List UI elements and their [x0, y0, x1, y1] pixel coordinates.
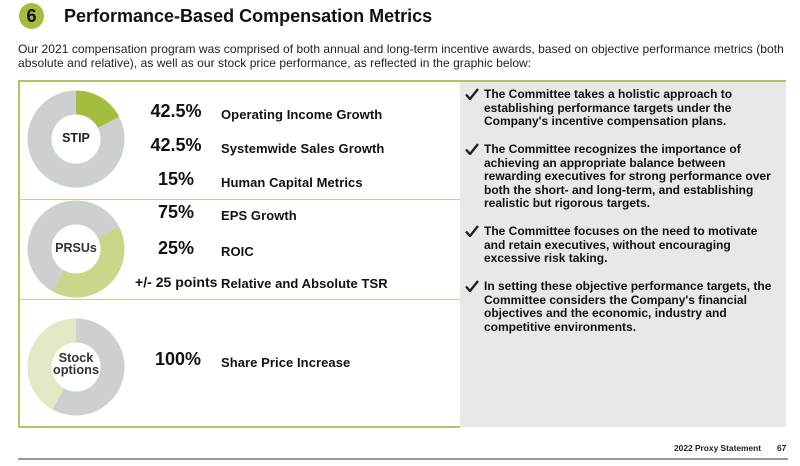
donut chart: Stock options — [28, 318, 124, 416]
row divider — [19, 299, 460, 300]
page number: 67 — [777, 443, 786, 453]
metric label: EPS growth: EPS Growth — [221, 208, 297, 223]
metric label: operating income: Operating Income Growth — [221, 107, 382, 122]
donut chart: PRSUs — [28, 200, 124, 298]
bullet text 2: achieving an appropriate balance between — [484, 156, 725, 170]
bullet text 4: competitive environments. — [484, 320, 636, 334]
bullet text 4: objectives and the economic, industry and — [484, 306, 727, 320]
bullet text 4: In setting these objective performance targets, the — [484, 279, 771, 293]
icon: check 1 — [465, 88, 479, 100]
donut label: Stock options: Stock — [59, 350, 93, 365]
metric value: 100%: 100% — [155, 349, 201, 369]
icon: check 3 — [465, 225, 479, 237]
panel: metrics frame — [18, 80, 460, 428]
icon: check 2 — [465, 143, 479, 155]
donut label: Stock options — [53, 350, 99, 377]
metric value: TSR points: +/- 25 points — [135, 274, 217, 290]
row divider — [19, 199, 460, 200]
bullet text 2: both the short- and long-term, and establishing — [484, 183, 753, 197]
title: Performance-Based Compensation Metrics — [64, 6, 432, 26]
bullet text 2: realistic but rigorous targets. — [484, 196, 650, 210]
section number badge — [19, 3, 44, 29]
metric value: 75% EPS: 75% — [158, 202, 194, 222]
bullet text 1: The Committee takes a holistic approach to — [484, 87, 732, 101]
bullet text 3: and retain executives, without encouraging — [484, 238, 731, 252]
donut label: PRSUs: PRSUs — [55, 241, 97, 255]
icon: check 4 — [465, 280, 479, 292]
metric value: 42.5% operating income: 42.5% — [150, 101, 202, 121]
donut label: Stock options: options — [53, 362, 99, 377]
donut chart: STIP — [28, 90, 124, 188]
bullet text 4 — [484, 279, 771, 334]
intro text — [18, 42, 784, 70]
donut label: STIP: STIP — [62, 131, 90, 145]
bullet text 2: The Committee recognizes the importance of — [484, 142, 741, 156]
bullet text 3 — [484, 224, 757, 265]
intro text: absolute and relative), as well as our stock price performance, as reflected in the graphic below: — [18, 56, 531, 70]
metric label: share price: Share Price Increase — [221, 355, 350, 370]
footer rule — [18, 458, 788, 460]
bullet text 3: The Committee focuses on the need to motivate — [484, 224, 757, 238]
metric label: human capital: Human Capital Metrics — [221, 175, 363, 190]
metric value: 42.5% systemwide sales: 42.5% — [150, 135, 202, 155]
bullet text 4: Committee considers the Company's financial — [484, 293, 747, 307]
footer label: 2022 Proxy Statement — [674, 443, 761, 453]
metric label: TSR: Relative and Absolute TSR — [221, 276, 388, 291]
panel: committee notes background — [460, 80, 786, 427]
bullet text 3: excessive risk taking. — [484, 251, 607, 265]
metric value: 15% human capital: 15% — [158, 169, 194, 189]
bullet text 2 — [484, 142, 771, 210]
bullet text 1: establishing performance targets under the — [484, 101, 731, 115]
metric value: 25% ROIC: 25% — [158, 238, 194, 258]
bullet text 2: rewarding executives for strong performance over — [484, 169, 771, 183]
intro text: Our 2021 compensation program was comprised of both annual and long-term incentive awards, based on objective performance metrics (both — [18, 42, 784, 56]
section number badge: 6 — [26, 6, 36, 26]
bullet text 1: Company's incentive compensation plans. — [484, 114, 726, 128]
bullet text 1 — [484, 87, 732, 128]
metric label: ROIC: ROIC — [221, 244, 254, 259]
metric label: systemwide sales: Systemwide Sales Growth — [221, 141, 384, 156]
